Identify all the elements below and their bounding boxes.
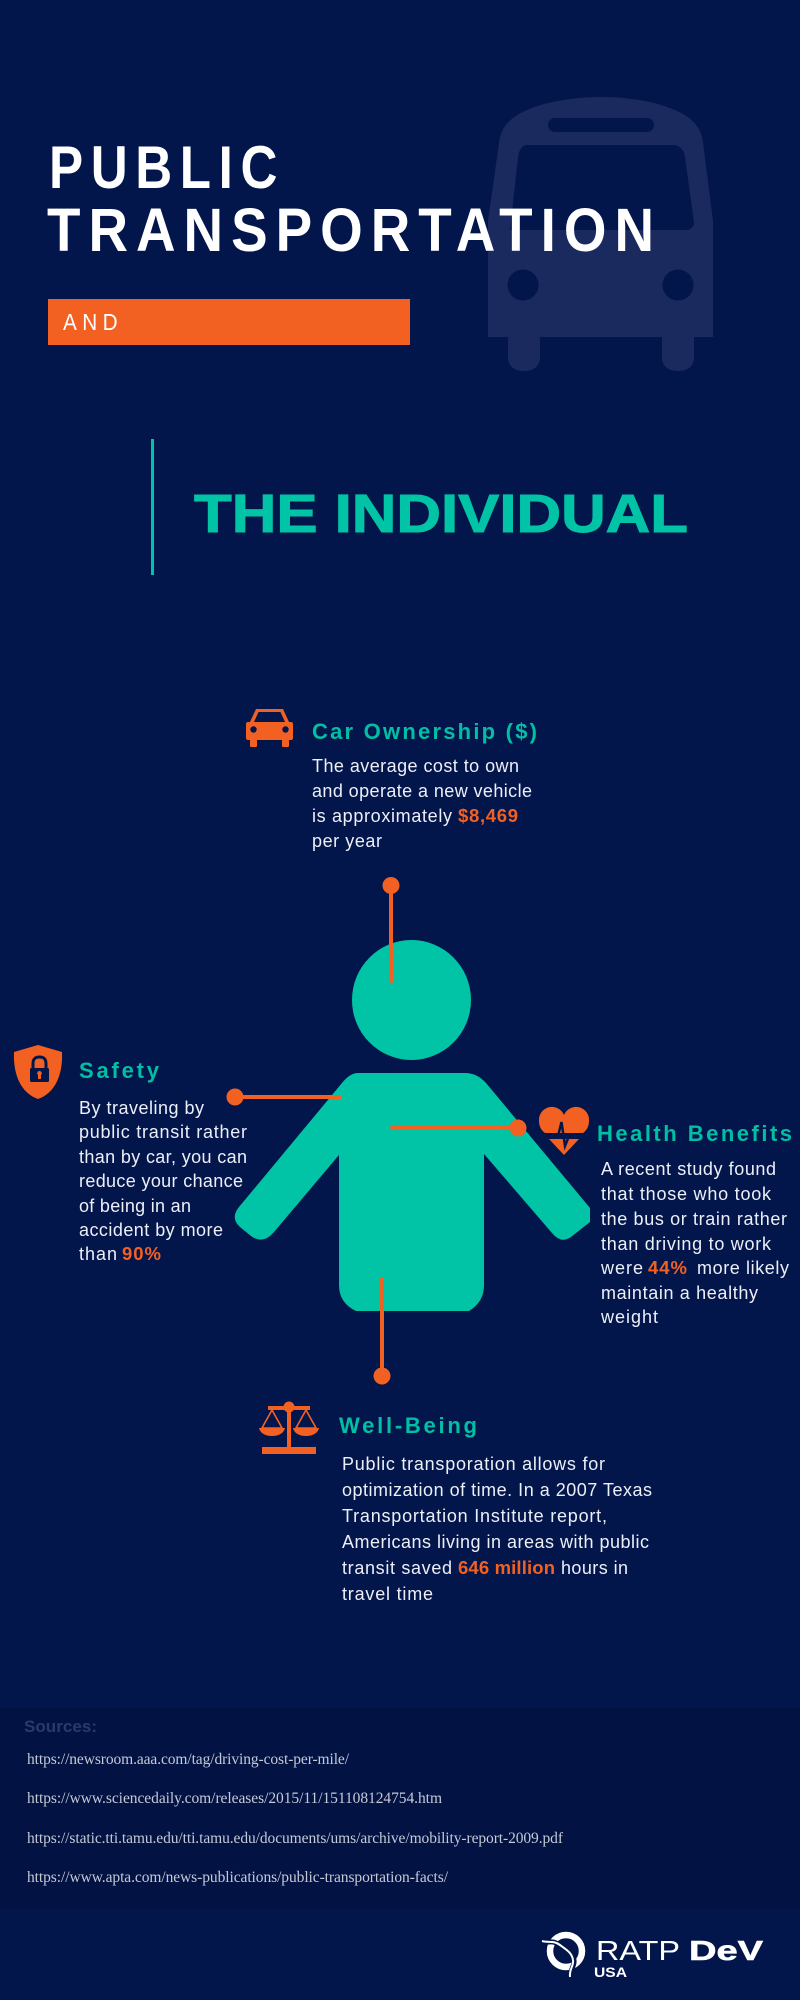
text: source links [27, 1751, 564, 1886]
text: safety body: of being in an [79, 1196, 191, 1216]
text: safety body: public transit rather [79, 1122, 247, 1142]
heading: sources: Sources: [24, 1717, 97, 1736]
text: health benefits body: A recent study found [601, 1159, 776, 1179]
text: well-being body: transit saved [342, 1558, 452, 1578]
text: safety body: than [79, 1244, 117, 1264]
heading: safety: Safety [79, 1058, 160, 1083]
logo: RATP Dev USA: USA [594, 1964, 627, 1980]
text: health benefits body: weight [600, 1307, 658, 1327]
text: car ownership body: $8,469 [458, 805, 518, 826]
text: well-being body: Public transporation allows for [342, 1454, 605, 1474]
text: car ownership body: and operate a new vehicle [312, 781, 532, 801]
subtitle bar: AND: AND [63, 309, 123, 335]
heading: the individual [151, 439, 688, 575]
icon: shield with lock [14, 1045, 62, 1099]
text: well-being body: 646 million [458, 1557, 555, 1578]
panel: car ownership [246, 709, 537, 851]
panel: health benefits [539, 1107, 792, 1327]
text: health benefits body: maintain a healthy [601, 1283, 758, 1303]
text: health benefits body [600, 1159, 789, 1327]
text: source links: https://static.tti.tamu.edu/tti.tamu.edu/documents/ums/archive/mobility-report-2009.pdf [27, 1830, 564, 1847]
text: safety body: reduce your chance [79, 1171, 243, 1191]
text: source links: https://newsroom.aaa.com/tag/driving-cost-per-mile/ [27, 1751, 350, 1768]
icon: bus watermark [488, 97, 713, 371]
text: safety body: than by car, you can [79, 1147, 247, 1167]
text: well-being body: travel time [342, 1584, 433, 1604]
icon: heart with pulse [539, 1107, 589, 1155]
text: well-being body: Transportation Institute report, [342, 1506, 607, 1526]
title: PUBLIC [49, 133, 285, 201]
icon: balance scales [259, 1402, 319, 1454]
subtitle bar: AND [48, 299, 410, 345]
text: health benefits body: than driving to work [601, 1234, 772, 1254]
text: safety body: 90% [122, 1243, 161, 1264]
text: health benefits body: that those who took [601, 1184, 772, 1204]
heading: well-being: Well-Being [339, 1413, 477, 1438]
icon: car [246, 709, 293, 747]
text: source links: https://www.apta.com/news-publications/public-transportation-facts/ [27, 1869, 449, 1886]
text: safety body [79, 1098, 247, 1264]
text: health benefits body: 44% [648, 1257, 687, 1278]
panel: well-being [259, 1402, 652, 1604]
text: car ownership body: The average cost to own [312, 756, 519, 776]
heading: health benefits: Health Benefits [597, 1121, 792, 1146]
logo: RATP Dev USA: RATP [596, 1935, 680, 1966]
connector: head to car ownership [382, 877, 400, 981]
heading: car ownership: Car Ownership ($) [312, 719, 537, 744]
text: well-being body: Americans living in areas with public [342, 1532, 649, 1552]
text: well-being body [342, 1454, 652, 1604]
figure: person [235, 940, 590, 1311]
text: car ownership body [312, 756, 532, 851]
text: source links: https://www.sciencedaily.com/releases/2015/11/151108124754.htm [27, 1790, 442, 1807]
text: safety body: accident by more [79, 1220, 223, 1240]
title [47, 133, 662, 265]
text: health benefits body: the bus or train rather [601, 1209, 787, 1229]
text: well-being body: optimization of time. In a 2007 Texas [342, 1480, 652, 1500]
text: car ownership body: per year [312, 831, 382, 851]
panel: safety [14, 1045, 247, 1264]
title: TRANSPORTATION [47, 196, 662, 265]
text: health benefits body: were [600, 1258, 643, 1278]
text: safety body: By traveling by [79, 1098, 204, 1118]
logo: RATP Dev USA: DeV [689, 1935, 763, 1966]
logo: RATP Dev USA [541, 1935, 763, 1980]
text: well-being body: hours in [561, 1558, 628, 1578]
text: health benefits body: more likely [697, 1258, 789, 1278]
text: car ownership body: is approximately [312, 806, 452, 826]
connector: torso to well-being [374, 1279, 390, 1384]
heading: the individual: THE INDIVIDUAL [194, 485, 688, 544]
panel: sources [0, 1708, 800, 1909]
connector: shoulder to safety [226, 1088, 340, 1106]
connector: chest to health benefits [392, 1120, 526, 1136]
